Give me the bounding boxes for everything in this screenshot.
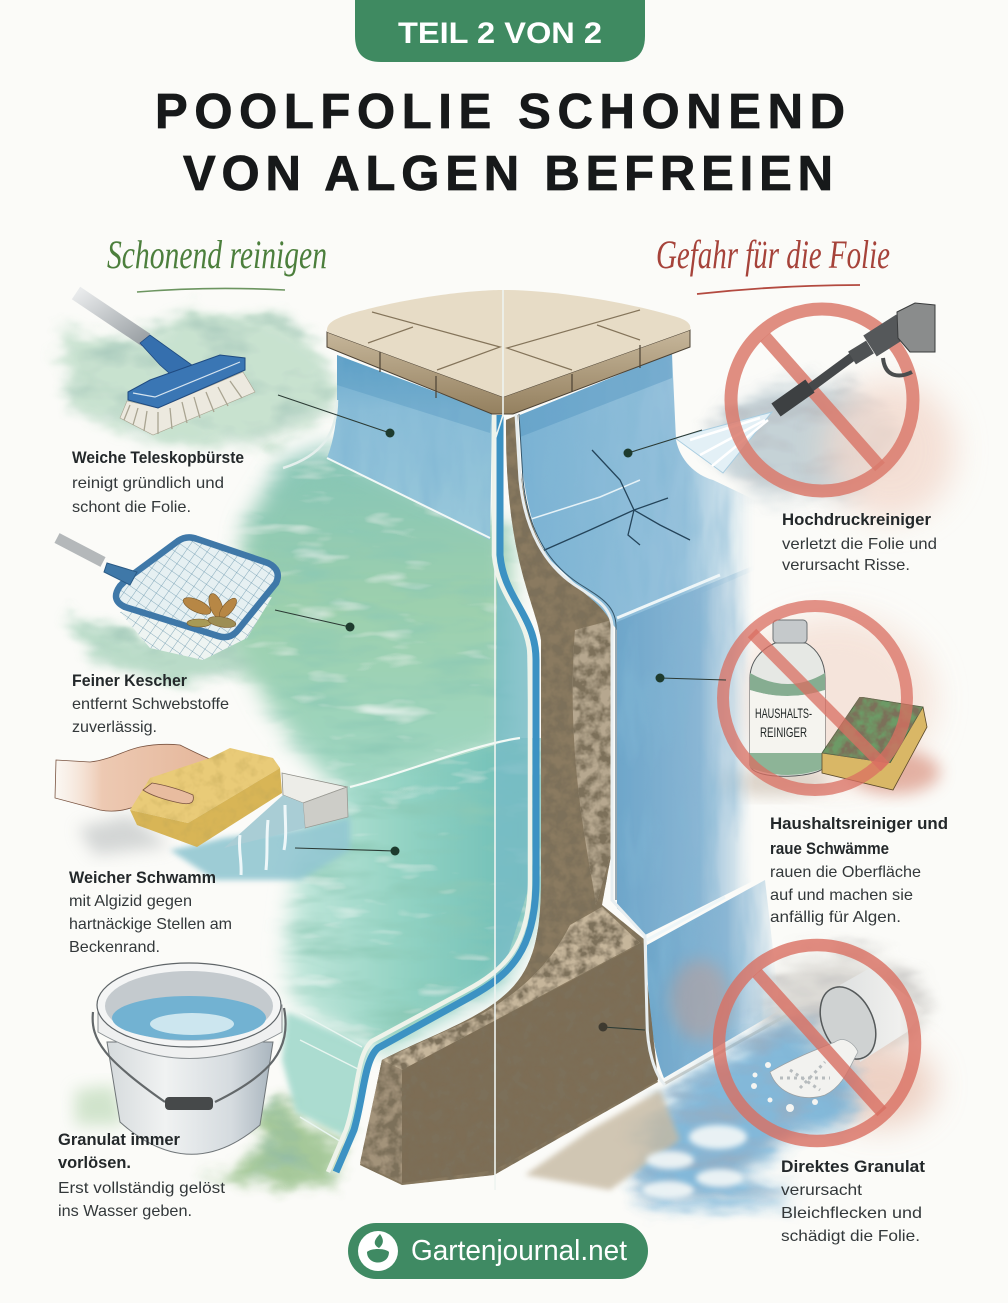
text: household cleaner: auf und machen sie — [770, 887, 913, 904]
title: POOLFOLIE SCHONEND — [155, 85, 845, 139]
text: telescopic brush: reinigt gründlich und — [72, 475, 224, 492]
text: soft sponge: Beckenrand. — [69, 939, 160, 956]
washes behind right illustrations — [710, 380, 955, 1127]
heading: gefahr für die folie — [656, 232, 890, 294]
text: household cleaner: raue Schwämme — [770, 840, 889, 858]
heading: gefahr für die folie: Gefahr für die Folie — [656, 232, 890, 277]
footer badge — [348, 1223, 648, 1279]
text: pressure washer: verletzt die Folie und — [782, 536, 937, 553]
left upper pool wall — [283, 355, 492, 540]
text: dissolve granules: vorlösen. — [58, 1154, 131, 1172]
text: household cleaner: Haushaltsreiniger und — [770, 815, 948, 833]
text: direct granules: Direktes Granulat — [781, 1158, 926, 1176]
text: household cleaner: anfällig für Algen. — [770, 909, 901, 926]
text: soft sponge: Weicher Schwamm — [69, 869, 216, 887]
heading: schonend reinigen: Schonend reinigen — [107, 232, 327, 277]
text: soft sponge — [69, 869, 232, 956]
center divider line — [495, 290, 503, 1190]
leader line: cleaner — [656, 674, 726, 682]
right pool walls and floors — [520, 353, 860, 1205]
text: pressure washer — [782, 511, 937, 574]
leader line: net — [275, 610, 354, 632]
text: dissolve granules — [58, 1131, 226, 1220]
text: direct granules: schädigt die Folie. — [781, 1228, 920, 1245]
text: fine net: entfernt Schwebstoffe — [72, 696, 229, 713]
title: VON ALGEN BEFREIEN — [183, 147, 833, 201]
text: telescopic brush: schont die Folie. — [72, 499, 191, 516]
text: dissolve granules: Granulat immer — [58, 1131, 181, 1149]
text: fine net: Feiner Kescher — [72, 672, 188, 690]
heading: schonend reinigen — [107, 232, 327, 292]
pool water, left half — [235, 445, 545, 1143]
icon: household cleaner and sponge prohibited — [723, 606, 927, 790]
text: direct granules — [781, 1158, 926, 1245]
icon: hand with sponge — [55, 744, 350, 880]
text: dissolve granules: Erst vollständig gelöst — [58, 1180, 226, 1197]
pool coping stones — [327, 290, 690, 414]
icon: fine net — [57, 537, 278, 660]
text: soft sponge: hartnäckige Stellen am — [69, 916, 232, 933]
icon: telescopic brush — [76, 293, 255, 435]
text: pressure washer: Hochdruckreiniger — [782, 511, 932, 529]
text: soft sponge: mit Algizid gegen — [69, 893, 192, 910]
leader line: brush — [278, 395, 394, 438]
icon: direct granules prohibited — [719, 945, 925, 1141]
footer badge: Gartenjournal.net — [411, 1235, 627, 1267]
text: pressure washer: verursacht Risse. — [782, 557, 910, 574]
text: direct granules: Bleichflecken und — [781, 1205, 922, 1222]
watercolor washes behind left illustrations — [60, 310, 345, 1185]
icon: pressure washer prohibited — [675, 303, 935, 491]
title badge — [355, 0, 645, 62]
text: dissolve granules: ins Wasser geben. — [58, 1203, 192, 1220]
text: household cleaner — [770, 815, 948, 926]
leader line: pressure washer — [624, 430, 702, 458]
text: telescopic brush — [72, 449, 244, 516]
pool wall cross-section: concrete and liner — [328, 414, 665, 1185]
title — [155, 85, 845, 201]
leader line: granules — [598, 1022, 645, 1032]
icon: household cleaner and sponge prohibited: REINIGER — [760, 724, 807, 740]
icon: household cleaner and sponge prohibited: HAUSHALTS- — [755, 705, 812, 721]
text: fine net: zuverlässig. — [72, 719, 157, 736]
icon: bucket with water — [93, 963, 286, 1154]
text: direct granules: verursacht — [781, 1182, 863, 1199]
text: fine net — [72, 672, 229, 736]
title badge: TEIL 2 VON 2 — [398, 17, 602, 50]
leader line: sponge — [295, 846, 400, 856]
text: telescopic brush: Weiche Teleskopbürste — [72, 449, 244, 467]
text: household cleaner: rauen die Oberfläche — [770, 864, 921, 881]
